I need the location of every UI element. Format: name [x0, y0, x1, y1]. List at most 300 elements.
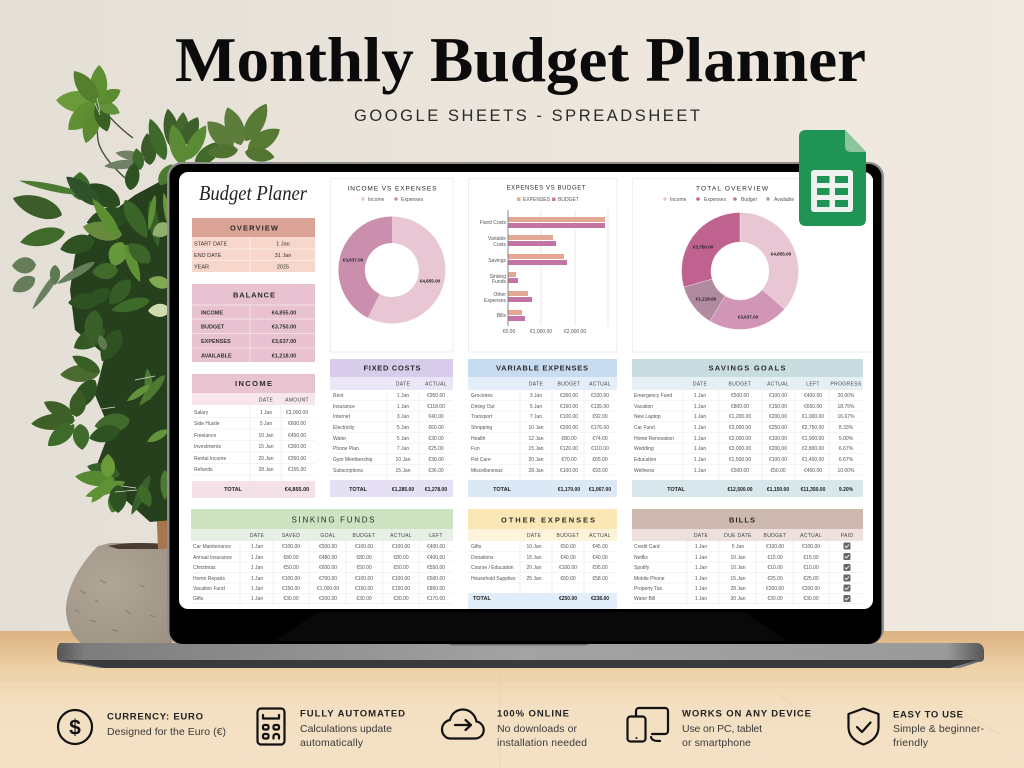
panel: sinking funds table: €100.00 — [355, 576, 373, 582]
panel: variable expenses table: 15 Jan — [528, 446, 544, 452]
panel: bills table: Spotify — [634, 565, 650, 571]
panel: savings goals table: €450.00 — [804, 468, 822, 474]
panel: other expenses table: €250.00 — [559, 596, 577, 602]
panel: income table: Side Hustle — [194, 421, 220, 427]
legend: income vs expenses: Income — [368, 197, 385, 203]
panel: other expenses table: TOTAL — [473, 596, 491, 602]
bar chart: expenses vs budget: Costs — [493, 242, 506, 248]
panel: sinking funds table: €480.00 — [319, 555, 337, 561]
panel: balance: AVAILABLE — [201, 353, 232, 359]
panel: income table: Investments — [194, 444, 221, 450]
panel: bills table: Mobile Phone — [634, 576, 665, 582]
panel: fixed costs table: FIXED COSTS — [364, 364, 420, 372]
bar chart: expenses vs budget: Savings — [488, 258, 506, 264]
panel: income table: Freelance — [194, 433, 216, 439]
panel: income table: €350.00 — [288, 456, 306, 462]
donut chart: income vs expenses: €3,637.00 — [343, 258, 364, 263]
panel: bills table: €100.00 — [766, 544, 784, 550]
panel: savings goals table: LEFT — [806, 382, 820, 388]
panel: other expenses table: DATE — [527, 533, 541, 539]
panel: other expenses table: 20 Jan — [526, 565, 542, 571]
panel: sinking funds table: 1 Jan — [251, 544, 263, 550]
feature: automation: Calculations update — [300, 723, 392, 735]
panel: savings goals table: 20.00% — [838, 393, 855, 399]
panel: bills table: €25.00 — [803, 576, 819, 582]
donut chart: total overview: €1,218.00 — [696, 297, 717, 302]
panel: overview: START DATE — [194, 241, 228, 247]
panel: variable expenses table: TOTAL — [493, 487, 512, 493]
panel: savings goals table: 1 Jan — [694, 446, 706, 452]
panel: fixed costs table: €30.00 — [428, 457, 444, 463]
panel: variable expenses table: €80.00 — [561, 436, 577, 442]
panel: balance: €3,750.00 — [272, 324, 296, 330]
panel: fixed costs table: 7 Jan — [397, 446, 409, 452]
panel: other expenses table: €238.00 — [591, 596, 609, 602]
panel: variable expenses table: €350.00 — [560, 393, 578, 399]
panel: sinking funds table: €100.00 — [392, 544, 410, 550]
wooden table — [0, 631, 1024, 768]
panel: savings goals table: €2,750.00 — [802, 425, 824, 431]
panel: other expenses table: €40.00 — [560, 555, 576, 561]
panel: bills table: €10.00 — [803, 565, 819, 571]
panel: income table: Rental Income — [194, 456, 226, 462]
panel: savings goals table: €400.00 — [804, 393, 822, 399]
panel: sinking funds table: SAVED — [282, 533, 300, 539]
panel: variable expenses table: 28 Jan — [528, 468, 544, 474]
donut chart: income vs expenses — [338, 216, 445, 323]
panel: variable expenses table: €70.00 — [561, 457, 577, 463]
panel: other expenses table: ACTUAL — [589, 533, 611, 539]
panel: variable expenses table: Groceries — [471, 393, 493, 399]
panel: other expenses table: Gifts — [471, 544, 482, 550]
panel: sinking funds table: €30.00 — [393, 596, 409, 602]
panel: other expenses table: €58.00 — [592, 576, 608, 582]
panel: overview: 2025 — [277, 264, 289, 270]
feature: online: No downloads or — [497, 723, 578, 735]
panel: balance: INCOME — [201, 310, 223, 316]
legend: total overview: Available — [774, 197, 794, 203]
panel: savings goals table: €250.00 — [769, 425, 787, 431]
legend: expenses vs budget: EXPENSES — [523, 197, 551, 203]
panel: bills table: Netflix — [634, 555, 648, 561]
panel: fixed costs table: Insurance — [333, 404, 355, 410]
panel: bills table: Property Tax — [634, 586, 662, 592]
panel: income table: 20 Jan — [258, 456, 274, 462]
panel: sinking funds table: €100.00 — [392, 576, 410, 582]
donut chart: total overview: €4,855.00 — [771, 252, 792, 257]
feature: automation — [258, 708, 405, 749]
panel: fixed costs table: €60.00 — [428, 425, 444, 431]
panel: sinking funds table: €700.00 — [319, 576, 337, 582]
donut chart: total overview: €3,750.00 — [693, 245, 714, 250]
panel: bills table: 1 Jan — [695, 576, 707, 582]
legend: income vs expenses — [361, 197, 423, 203]
bar chart: expenses vs budget: €1,000.00 — [530, 329, 552, 335]
panel: savings goals table: Home Renovation — [634, 436, 674, 442]
screen: spreadsheet — [191, 178, 873, 609]
panel: savings goals table: 6.67% — [839, 446, 854, 452]
panel: savings goals table: 9.20% — [839, 487, 854, 493]
panel: income table: Refunds — [194, 467, 213, 473]
legend: total overview: Expenses — [704, 197, 726, 203]
panel: other expenses table: 15 Jan — [526, 555, 542, 561]
panel: variable expenses table: ACTUAL — [589, 382, 611, 388]
bar chart: expenses vs budget: Bills — [497, 313, 506, 319]
panel: sinking funds table: 1 Jan — [251, 565, 263, 571]
panel: savings goals table: €500.00 — [731, 468, 749, 474]
panel: variable expenses table: Miscellaneous — [471, 468, 503, 474]
panel: other expenses table: €40.00 — [592, 555, 608, 561]
panel: sinking funds table: €30.00 — [356, 596, 372, 602]
panel: other expenses table: BUDGET — [557, 533, 579, 539]
panel: variable expenses table — [468, 359, 617, 497]
panel: bills table: €15.00 — [767, 555, 783, 561]
panel: overview: YEAR — [194, 264, 209, 270]
panel: sinking funds table: ACTUAL — [390, 533, 412, 539]
panel: fixed costs table: €25.00 — [428, 446, 444, 452]
panel: savings goals table: Emergency Fund — [634, 393, 672, 399]
panel: sinking funds table: Annual Insurance — [193, 555, 232, 561]
panel: sinking funds table: Christmas — [193, 565, 216, 571]
panel: bills table: 30 Jan — [730, 596, 746, 602]
feature: automation: FULLY AUTOMATED — [300, 708, 405, 720]
panel: bills table: 28 Jan — [730, 586, 746, 592]
panel: savings goals table: €200.00 — [769, 414, 787, 420]
panel: variable expenses table: Shopping — [471, 425, 492, 431]
panel: savings goals table: Education — [634, 457, 656, 463]
panel: sinking funds table: GOAL — [320, 533, 336, 539]
bar chart: expenses vs budget — [480, 210, 608, 335]
icon: dollar coin: $ — [69, 716, 81, 740]
panel: savings goals table: €800.00 — [731, 404, 749, 410]
panel: income table: TOTAL — [224, 487, 243, 493]
panel: other expenses table: €100.00 — [559, 565, 577, 571]
panel: income table: INCOME — [235, 379, 272, 388]
panel: bills table: €30.00 — [803, 596, 819, 602]
panel: bills table: 1 Jan — [695, 555, 707, 561]
legend: income vs expenses: Expenses — [401, 197, 423, 203]
panel: bills table: €25.00 — [767, 576, 783, 582]
panel: balance — [192, 284, 315, 362]
panel: variable expenses table: €200.00 — [560, 425, 578, 431]
panel: variable expenses table: €176.00 — [591, 425, 609, 431]
panel: savings goals table: €650.00 — [804, 404, 822, 410]
panel: variable expenses table: 10 Jan — [528, 425, 544, 431]
panel: variable expenses table: 12 Jan — [528, 436, 544, 442]
feature: easy to use: Simple & beginner- — [893, 723, 984, 735]
panel: bills table: BUDGET — [764, 533, 786, 539]
panel: balance: BUDGET — [201, 324, 225, 330]
panel: variable expenses table: BUDGET — [558, 382, 580, 388]
feature: any device — [628, 708, 811, 749]
panel: variable expenses table: €100.00 — [560, 468, 578, 474]
panel: income table: 10 Jan — [258, 433, 274, 439]
panel: other expenses table: €45.00 — [592, 544, 608, 550]
panel: variable expenses table: €65.00 — [592, 457, 608, 463]
panel: savings goals table: 8.33% — [839, 425, 854, 431]
legend: total overview — [663, 197, 794, 203]
panel: income table: 1 Jan — [260, 410, 272, 416]
feature: easy to use — [848, 708, 984, 749]
feature: online — [442, 708, 587, 749]
panel: savings goals table: TOTAL — [667, 487, 686, 493]
panel: savings goals table: €2,000.00 — [729, 436, 751, 442]
panel: savings goals table: €3,000.00 — [729, 425, 751, 431]
panel: savings goals table: 5.00% — [839, 436, 854, 442]
panel: income table: €3,000.00 — [286, 410, 308, 416]
panel: variable expenses table: €93.00 — [592, 468, 608, 474]
panel: balance: €3,637.00 — [272, 339, 296, 345]
feature: easy to use: friendly — [893, 737, 929, 749]
panel: bills table: ACTUAL — [800, 533, 822, 539]
panel: variable expenses table: €320.00 — [591, 393, 609, 399]
panel: fixed costs table: Subscriptions — [333, 468, 364, 474]
panel: other expenses table: Course / Education — [471, 565, 514, 571]
panel: savings goals table: €100.00 — [769, 436, 787, 442]
panel: savings goals table: €100.00 — [769, 393, 787, 399]
panel: sinking funds table: €850.00 — [427, 586, 445, 592]
feature: automation: automatically — [300, 737, 364, 749]
panel: variable expenses table: Pet Care — [471, 457, 491, 463]
panel: savings goals table: €1,500.00 — [729, 457, 751, 463]
panel: fixed costs table: TOTAL — [349, 487, 368, 493]
panel: savings goals table: 18.75% — [838, 404, 855, 410]
panel: savings goals table: €2,800.00 — [802, 446, 824, 452]
panel: bills table: DUE DATE — [724, 533, 752, 539]
panel: variable expenses table: €1,067.00 — [589, 487, 611, 493]
panel: fixed costs table: DATE — [396, 382, 410, 388]
panel: savings goals table: €50.00 — [770, 468, 786, 474]
panel: other expenses table: 25 Jan — [526, 576, 542, 582]
panel: fixed costs table: 5 Jan — [397, 436, 409, 442]
panel: total overview chart: TOTAL OVERVIEW — [696, 186, 769, 192]
panel: variable expenses table: €1,170.00 — [558, 487, 580, 493]
panel: sinking funds table: Gifts — [193, 596, 204, 602]
panel: sinking funds table: Vacation Fund — [193, 586, 225, 592]
feature: any device: or smartphone — [682, 737, 751, 749]
panel: variable expenses table: €110.00 — [591, 446, 609, 452]
plant pot — [66, 543, 172, 645]
panel: variable expenses table: €100.00 — [560, 414, 578, 420]
panel: balance: €1,218.00 — [272, 353, 296, 359]
legend: expenses vs budget — [517, 197, 579, 203]
bar chart: expenses vs budget: €0.00 — [503, 329, 515, 335]
panel: sinking funds table: BUDGET — [353, 533, 375, 539]
panel: bills table: DATE — [694, 533, 708, 539]
feature: any device: WORKS ON ANY DEVICE — [682, 708, 811, 720]
panel: balance: €4,855.00 — [272, 310, 296, 316]
panel: bills table: 1 Jan — [695, 586, 707, 592]
icon: cloud arrow — [442, 710, 484, 739]
panel: sinking funds table: €150.00 — [392, 586, 410, 592]
panel: sinking funds table: €80.00 — [393, 555, 409, 561]
panel: sinking funds table: €150.00 — [355, 586, 373, 592]
panel: sinking funds table: 1 Jan — [251, 576, 263, 582]
icon: dollar coin — [58, 710, 92, 744]
bar chart: expenses vs budget: Sinking — [490, 274, 506, 280]
panel: savings goals table: €1,000.00 — [802, 414, 824, 420]
panel: income table: €155.00 — [288, 467, 306, 473]
panel: savings goals table: 1 Jan — [694, 404, 706, 410]
panel: bills table: €200.00 — [802, 586, 820, 592]
panel: variable expenses table: Health — [471, 436, 486, 442]
bar chart: expenses vs budget: Variable — [488, 236, 506, 242]
panel: bills table: 1 Jan — [695, 565, 707, 571]
feature: online: 100% ONLINE — [497, 708, 569, 720]
panel: sinking funds table: €550.00 — [427, 565, 445, 571]
panel: savings goals table: €1,400.00 — [802, 457, 824, 463]
panel: fixed costs table: €950.00 — [427, 393, 445, 399]
panel: savings goals table: ACTUAL — [767, 382, 789, 388]
plant foliage — [9, 65, 285, 522]
panel: overview: OVERVIEW — [230, 224, 279, 232]
panel: bills table: 1 Jan — [695, 544, 707, 550]
panel: fixed costs table: €1,278.00 — [425, 487, 447, 493]
feature: easy to use: EASY TO USE — [893, 710, 963, 720]
panel: sinking funds table — [191, 509, 453, 605]
panel: fixed costs table: 1 Jan — [397, 393, 409, 399]
panel: variable expenses table: €74.00 — [592, 436, 608, 442]
panel: savings goals table: 10.00% — [838, 468, 855, 474]
panel: variable expenses table: DATE — [529, 382, 543, 388]
panel: other expenses table: €95.00 — [592, 565, 608, 571]
panel: sinking funds table: SINKING FUNDS — [292, 516, 374, 524]
panel: savings goals table: 1 Jan — [694, 457, 706, 463]
panel: bills table: 15 Jan — [730, 576, 746, 582]
panel: sinking funds table: €400.00 — [427, 555, 445, 561]
panel: fixed costs table: 15 Jan — [395, 468, 411, 474]
paid checkboxes — [844, 542, 850, 602]
panel: sinking funds table: 1 Jan — [251, 586, 263, 592]
panel: sinking funds table: €80.00 — [283, 555, 299, 561]
panel: bills table: €15.00 — [803, 555, 819, 561]
panel: sinking funds table: €50.00 — [283, 565, 299, 571]
panel: bills table: Water Bill — [634, 596, 655, 602]
feature: currency: CURRENCY: EURO — [107, 712, 203, 722]
subtitle: GOOGLE SHEETS - SPREADSHEET — [354, 107, 700, 125]
logo: Budget Planer: Budget Planer — [199, 181, 308, 205]
panel: fixed costs table: €30.00 — [428, 436, 444, 442]
panel: overview: END DATE — [194, 253, 222, 259]
bar chart: expenses vs budget: Funds — [492, 279, 506, 285]
panel: fixed costs table: Water — [333, 436, 346, 442]
panel: bills table: Credit Card — [634, 544, 660, 550]
panel: sinking funds table: LEFT — [429, 533, 443, 539]
legend: total overview: Income — [670, 197, 687, 203]
panel: bills table: 1 Jan — [695, 596, 707, 602]
panel: sinking funds table: €100.00 — [282, 544, 300, 550]
panel: savings goals table: €1,150.00 — [767, 487, 789, 493]
donut chart: total overview — [682, 212, 799, 329]
panel: savings goals table: €12,500.00 — [727, 487, 753, 493]
panel: overview — [192, 218, 315, 272]
panel: income table: 28 Jan — [258, 467, 274, 473]
panel: other expenses table: €60.00 — [560, 576, 576, 582]
feature: currency — [58, 710, 226, 744]
panel: balance: BALANCE — [233, 290, 275, 300]
panel: income vs expenses chart — [330, 178, 453, 352]
panel: fixed costs table: Gym Membership — [333, 457, 373, 463]
panel: savings goals table: €1,200.00 — [729, 414, 751, 420]
panel: savings goals table: 1 Jan — [694, 393, 706, 399]
panel: income table: €450.00 — [288, 433, 306, 439]
panel: income table: 5 Jan — [260, 421, 272, 427]
panel: bills table: PAID — [841, 533, 853, 539]
panel: income vs expenses chart: INCOME VS EXPENSES — [348, 186, 437, 192]
plant trunk — [156, 500, 170, 549]
panel: savings goals table: 16.67% — [838, 414, 855, 420]
feature: any device: Use on PC, tablet — [682, 723, 762, 735]
donut chart: income vs expenses: €4,855.00 — [420, 279, 441, 284]
panel: savings goals table: DATE — [693, 382, 707, 388]
panel: income table: €4,855.00 — [285, 487, 309, 493]
panel: fixed costs table: 10 Jan — [395, 457, 411, 463]
panel: income table: €300.00 — [288, 444, 306, 450]
panel: fixed costs table: 3 Jan — [397, 414, 409, 420]
icon: google sheets — [799, 130, 866, 226]
panel: other expenses table: 10 Jan — [526, 544, 542, 550]
panel: savings goals table: 1 Jan — [694, 468, 706, 474]
panel: fixed costs table: Internet — [333, 414, 351, 420]
panel: fixed costs table: €1,285.00 — [392, 487, 414, 493]
feature: currency: Designed for the Euro (€) — [107, 726, 226, 738]
panel: sinking funds table: €200.00 — [319, 596, 337, 602]
panel: variable expenses table: Fun — [471, 446, 480, 452]
panel: sinking funds table: €100.00 — [282, 576, 300, 582]
panel: bills table: €100.00 — [802, 544, 820, 550]
panel: other expenses table: Donations — [471, 555, 494, 561]
panel: variable expenses table: 7 Jan — [530, 414, 542, 420]
panel: fixed costs table: €36.00 — [428, 468, 444, 474]
panel: variable expenses table: 5 Jan — [530, 404, 542, 410]
bar chart: expenses vs budget: Expenses — [484, 298, 506, 304]
panel: savings goals table: Wedding — [634, 446, 654, 452]
panel: sinking funds table: €50.00 — [393, 565, 409, 571]
panel: bills table: 10 Jan — [730, 565, 746, 571]
panel: fixed costs table: €118.00 — [427, 404, 445, 410]
panel: sinking funds table: DATE — [250, 533, 264, 539]
laptop screen frame — [167, 162, 884, 644]
donut chart: total overview: €3,637.00 — [738, 315, 759, 320]
panel: variable expenses table: Transport — [471, 414, 493, 420]
panel: bills table: €30.00 — [767, 596, 783, 602]
panel: overview: 31 Jan — [275, 253, 291, 259]
panel: bills table: 10 Jan — [730, 555, 746, 561]
panel: total overview chart — [632, 178, 873, 352]
panel: sinking funds table: €1,000.00 — [317, 586, 339, 592]
panel: sinking funds table: €80.00 — [356, 555, 372, 561]
panel: sinking funds table: €400.00 — [427, 544, 445, 550]
panel: sinking funds table: €500.00 — [319, 544, 337, 550]
panel: savings goals table: €500.00 — [731, 393, 749, 399]
panel: savings goals table: €150.00 — [769, 404, 787, 410]
laptop base — [57, 643, 984, 668]
panel: savings goals table — [632, 359, 863, 497]
panel: income table: €600.00 — [288, 421, 306, 427]
panel: savings goals table: €200.00 — [769, 446, 787, 452]
panel: sinking funds table: €50.00 — [356, 565, 372, 571]
icon: tablet and monitor — [628, 708, 668, 742]
panel: savings goals table: €1,900.00 — [802, 436, 824, 442]
panel: savings goals table: New Laptop — [634, 414, 661, 420]
panel: fixed costs table — [330, 359, 453, 497]
panel: sinking funds table: Car Maintenance — [193, 544, 231, 550]
panel: savings goals table: 1 Jan — [694, 414, 706, 420]
panel: savings goals table: Wellness — [634, 468, 655, 474]
feature: online: installation needed — [497, 737, 587, 749]
panel: variable expenses table: 3 Jan — [530, 393, 542, 399]
panel: sinking funds table: Home Repairs — [193, 576, 225, 582]
